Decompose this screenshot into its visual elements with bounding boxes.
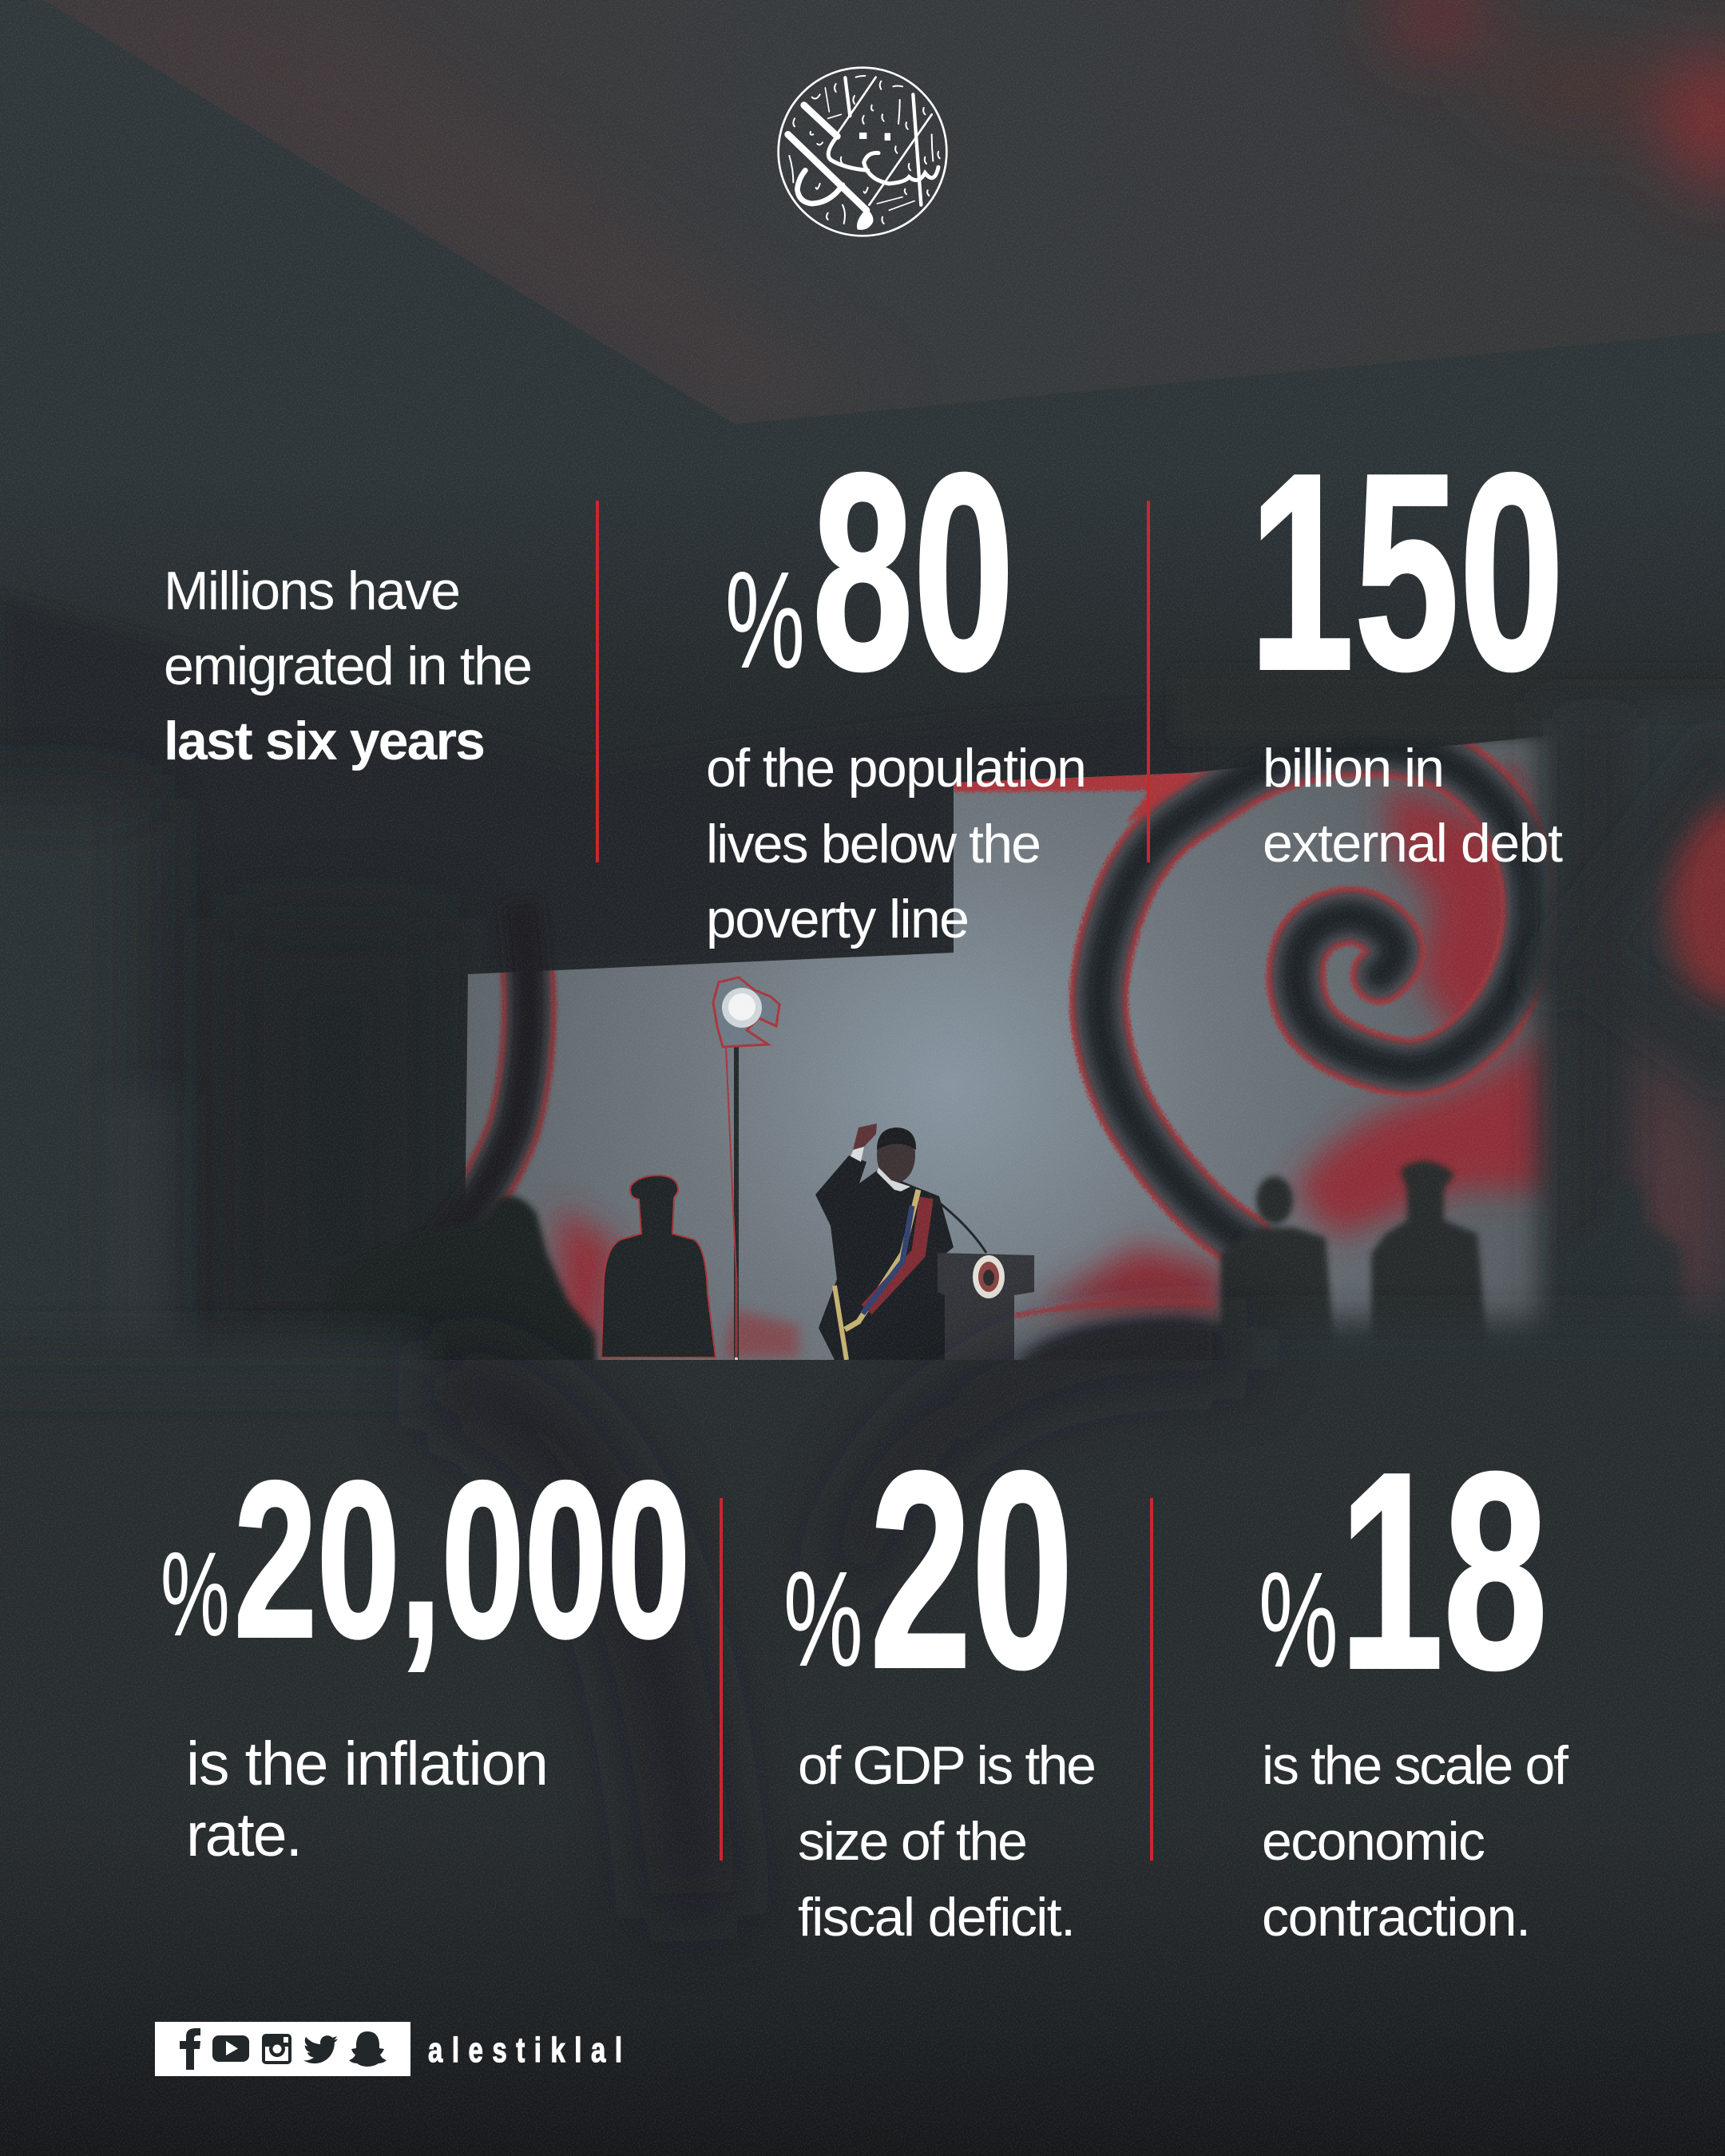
icon: youtube [212, 2035, 249, 2062]
halo of spiral [1099, 747, 1530, 1241]
handle text: alestiklal [428, 2031, 622, 2070]
blurred officials right [1220, 1161, 1489, 1373]
caption: is the inflation [186, 1730, 549, 1798]
head [877, 1128, 916, 1183]
iron spiral core [1099, 747, 1530, 1241]
Maduro at podium [815, 1124, 1034, 1360]
caption [186, 1730, 549, 1869]
percent sign: % [725, 542, 805, 697]
white panel [155, 2022, 410, 2076]
red outline of spiral [1099, 747, 1530, 1241]
stat: 150 billion debt [1249, 417, 1564, 874]
percent sign: % [1259, 1544, 1338, 1696]
caption: poverty line [706, 889, 970, 949]
stat: emigration text block: last six years [164, 711, 486, 771]
backdrop wall [465, 736, 1556, 1360]
number 150: 150 [1249, 417, 1564, 728]
faint official far right [1553, 1182, 1687, 1373]
stat: emigration text block: emigrated in the [164, 636, 533, 696]
caption [1263, 738, 1563, 874]
number 18: 18 [1339, 1415, 1548, 1727]
caption [798, 1735, 1096, 1948]
caption [1262, 1735, 1568, 1948]
icon: facebook [180, 2028, 200, 2070]
icon: snapchat [349, 2031, 387, 2067]
podium [938, 1253, 1034, 1360]
stat: 20,000 percent inflation [161, 1437, 690, 1869]
soft seam at floor top [0, 1334, 423, 1389]
icon: instagram [262, 2034, 291, 2064]
stage floor [0, 1360, 1725, 2156]
percent sign: % [783, 1544, 863, 1695]
background: ceiling plane [44, 0, 1725, 424]
soldier left of stand [601, 1175, 716, 1357]
stat: emigration text block: Millions have [164, 561, 461, 621]
stat: 80 percent poverty [706, 415, 1087, 949]
podium emblem [973, 1255, 1005, 1298]
dark band feathering top of spiral area [1174, 671, 1725, 739]
stat: 20 percent fiscal deficit [783, 1413, 1096, 1948]
caption: of the population [706, 738, 1087, 799]
caption: economic [1262, 1811, 1485, 1872]
divider: red line 3 [720, 1498, 723, 1861]
right dark column and ironwork [1501, 703, 1725, 1389]
logo: calligraphic seal [779, 68, 946, 236]
caption: lives below the [706, 814, 1041, 874]
caption: size of the [798, 1811, 1028, 1872]
social bar [155, 2022, 622, 2076]
background: dark awning [0, 596, 1198, 1437]
red edge bottom right [1014, 1302, 1214, 1316]
red speckle near stage [723, 1310, 799, 1357]
percent sign: % [161, 1527, 230, 1661]
caption: rate. [186, 1801, 303, 1869]
stat: 18 percent contraction [1259, 1415, 1568, 1948]
caption: external debt [1263, 813, 1563, 874]
haze at feet of officials [1230, 1318, 1725, 1389]
crowd silhouette left [319, 1196, 597, 1373]
number 20,000: 20,000 [234, 1437, 690, 1684]
icon: twitter [303, 2035, 338, 2063]
halo of left iron arc [435, 934, 529, 1254]
caption: of GDP is the [798, 1735, 1096, 1796]
caption: fiscal deficit. [798, 1887, 1076, 1948]
stat: emigration text block [164, 561, 533, 771]
divider: red line 2 [1147, 501, 1150, 862]
divider: red line 4 [1150, 1498, 1153, 1861]
caption: billion in [1263, 738, 1445, 799]
number 20: 20 [870, 1413, 1073, 1726]
dark wave over stage right [1006, 1316, 1246, 1381]
spotlight on stand [713, 977, 779, 1361]
red outline of left iron arc [435, 934, 529, 1254]
caption: contraction. [1262, 1887, 1531, 1948]
background: reddish tint along ceiling diagonal [44, 0, 894, 424]
red top streak [954, 763, 1195, 822]
microphone [926, 1193, 986, 1253]
red glow areas [559, 787, 1565, 1349]
caption [706, 738, 1087, 949]
divider: red line 1 [596, 501, 599, 862]
caption: is the scale of [1262, 1735, 1568, 1796]
number 80: 80 [812, 415, 1014, 728]
foreground blurred iron arcs [431, 1348, 1246, 1916]
background: red smudge on ceiling [1382, 0, 1725, 188]
photo: stage scene with Maduro [89, 696, 1725, 1658]
iron left arc core [435, 902, 529, 1254]
